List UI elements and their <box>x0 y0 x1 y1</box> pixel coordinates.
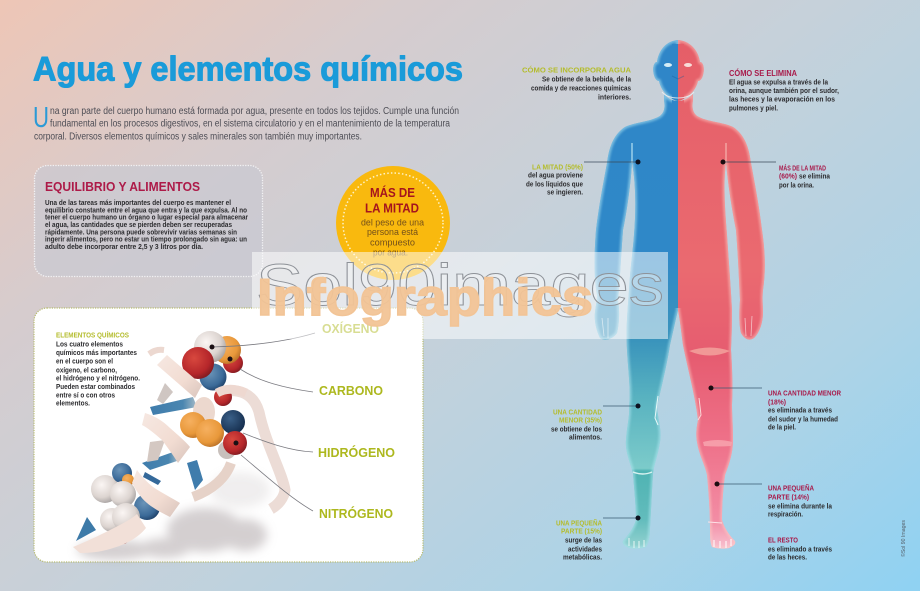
panel body text: ingerir alimentos, pero no estar un tiempo prolongado sin agua: un <box>45 237 247 244</box>
reflection shadow <box>77 472 270 560</box>
heading: EQUILIBRIO Y ALIMENTOS <box>45 179 200 194</box>
human body figure <box>595 40 765 549</box>
annotation: una pequeña parte 14% <box>714 482 832 519</box>
panel text: Los cuatro elementos <box>56 342 123 348</box>
body: blue half <box>595 40 678 549</box>
annotation: cómo se elimina: El agua se expulsa a través de la <box>729 80 828 86</box>
annotation: una cantidad menor 18%: de la piel. <box>768 425 796 432</box>
face details <box>662 63 694 98</box>
annotation: más de la mitad 60% <box>720 160 830 190</box>
panel text: en el cuerpo son el <box>56 358 113 366</box>
body: red edge glow <box>677 40 765 549</box>
annotation: cómo se elimina: las heces y la evaporación en los <box>729 97 835 104</box>
annotation: una cantidad menor 35% <box>551 404 640 442</box>
annotation: más de la mitad 60%: se elimina <box>799 174 830 181</box>
annotation: cómo se elimina: CÓMO SE ELIMINA <box>729 67 797 78</box>
annotation: cómo se elimina: orina, aunque también por el sudor, <box>729 88 839 95</box>
panel body text: rápidamente. Una persona puede sobrevivir varias semanas sin <box>45 230 237 236</box>
panel text: Pueden estar combinados <box>56 384 135 391</box>
annotation: una cantidad menor 35%: MENOR (35%) <box>559 418 602 425</box>
annotation: más de la mitad 60%: MÁS DE LA MITAD <box>779 164 826 172</box>
callout: más de la mitad: MÁS DE <box>370 185 415 200</box>
body: blue edge glow <box>595 40 679 549</box>
upper spheres <box>214 388 232 406</box>
molecule illustration <box>73 331 315 560</box>
annotation: una pequeña parte 15%: metabólicas. <box>563 555 602 562</box>
annotation: una pequeña parte 14%: respiración. <box>768 512 803 519</box>
drop cap: U <box>33 102 49 134</box>
panel text: elementos. <box>56 401 90 408</box>
leader lines <box>212 333 315 511</box>
annotation: una pequeña parte 15%: actividades <box>568 546 602 554</box>
annotation: una cantidad menor 35%: alimentos. <box>569 435 602 442</box>
callout: más de la mitad: compuesto <box>370 238 415 248</box>
panel text: el hidrógeno y el nitrógeno. <box>56 376 140 382</box>
intro text block: corporal. Diversos elementos químicos y sales minerales son también muy importantes. <box>34 132 362 142</box>
annotation: el resto <box>768 538 832 562</box>
panel: elementos químicos <box>34 308 423 562</box>
watermark: Infographics <box>257 269 593 327</box>
panel text: oxígeno, el carbono, <box>56 367 117 374</box>
panel text: ELEMENTOS QUÍMICOS <box>56 330 129 340</box>
panel text: entre sí o con otros <box>56 392 115 400</box>
annotation: el resto: es eliminado a través <box>768 546 832 554</box>
intro text block <box>33 102 459 142</box>
annotation: una pequeña parte 15% <box>556 516 640 562</box>
annotation: la mitad 50%: se ingieren. <box>547 190 583 197</box>
molecule dots <box>210 344 238 446</box>
annotation: una cantidad menor 18% <box>708 386 841 432</box>
watermark <box>252 252 668 339</box>
annotation: cómo se elimina <box>729 67 839 112</box>
watermark: Sol90images <box>256 253 664 318</box>
label: hidrógeno: HIDRÓGENO <box>318 445 395 460</box>
front pale ribbons <box>157 355 202 398</box>
annotation: una pequeña parte 15%: UNA PEQUEÑA <box>556 518 602 528</box>
blue ribbon tip <box>76 517 96 541</box>
panel body text: el agua, las cantidades que se pierden deben ser recuperadas <box>45 222 232 229</box>
annotation: cómo se incorpora agua: comida y de reacciones químicas <box>531 86 631 92</box>
panel text <box>56 330 140 408</box>
annotation: cómo se elimina: pulmones y piel. <box>729 106 778 112</box>
annotation: una pequeña parte 15%: PARTE (15%) <box>561 529 602 536</box>
annotation: cómo se incorpora agua: Se obtiene de la bebida, de la <box>542 76 631 84</box>
panel body text: tener el cuerpo humano un órgano o lugar especial para almacenar <box>45 215 248 222</box>
body: red half <box>678 40 765 549</box>
panel body text: Una de las tareas más importantes del cuerpo es mantener el <box>45 200 231 207</box>
annotation: la mitad 50%: del agua proviene <box>528 173 583 180</box>
panel text: químicos más importantes <box>56 350 137 357</box>
annotation: la mitad 50%: LA MITAD (50%) <box>532 164 583 172</box>
annotation: la mitad 50%: de los líquidos que <box>526 182 583 188</box>
panel body text: equilibrio constante entre el agua que entra y la que expulsa. Al no <box>45 208 247 214</box>
mid link <box>193 397 215 427</box>
annotation: más de la mitad 60%: por la orina. <box>779 182 814 190</box>
annotation: el resto: de las heces. <box>768 555 807 562</box>
panel: equilibrio y alimentos <box>34 166 262 276</box>
annotation: el resto: EL RESTO <box>768 538 798 544</box>
annotation: cómo se incorpora agua: interiores. <box>598 94 631 102</box>
back tube and blue ribbon <box>149 350 285 509</box>
panel body text: adulto debe incorporar entre 2,5 y 3 litros por día. <box>45 244 203 251</box>
highlight lines and bands <box>602 143 752 548</box>
annotation: una pequeña parte 15%: surge de las <box>565 538 602 544</box>
label: oxígeno: OXÍGENO <box>322 321 379 336</box>
callout: más de la mitad: del peso de una <box>361 218 425 228</box>
lower spheres <box>91 475 119 503</box>
annotation: una pequeña parte 14%: UNA PEQUEÑA <box>768 484 814 492</box>
annotation: una cantidad menor 18%: (18%) <box>768 400 786 406</box>
annotation: una cantidad menor 35%: UNA CANTIDAD <box>553 410 602 416</box>
intro text block: fundamental en los procesos digestivos, en el sistema circulatorio y en el mantenimiento de la temperatura <box>50 118 450 130</box>
annotation: una pequeña parte 14%: PARTE (14%) <box>768 494 809 502</box>
annotation: cómo se incorpora agua <box>522 66 631 102</box>
annotation: una cantidad menor 35%: se obtiene de los <box>551 426 602 434</box>
callout: más de la mitad: LA MITAD <box>365 200 419 216</box>
credit: ©Sol 90 Images <box>900 519 907 557</box>
annotation: cómo se incorpora agua: CÓMO SE INCORPORA AGUA <box>522 66 631 74</box>
callout: más de la mitad <box>336 166 450 280</box>
annotation: la mitad 50% <box>526 160 640 197</box>
annotation: una cantidad menor 18%: UNA CANTIDAD MENOR <box>768 390 841 398</box>
intro text block: na gran parte del cuerpo humano está formada por agua, presente en todos los tejidos. Cumple una función <box>50 106 459 117</box>
callout: más de la mitad: persona está <box>367 227 419 238</box>
label: nitrógeno: NITRÓGENO <box>319 506 393 521</box>
annotation: más de la mitad 60%: (60%) <box>779 174 797 181</box>
annotation: una cantidad menor 18%: es eliminada a través <box>768 408 832 415</box>
panel body text <box>45 200 248 251</box>
callout: más de la mitad: por agua. <box>373 248 408 258</box>
title: Agua y elementos químicos <box>33 50 463 88</box>
label: carbono: CARBONO <box>319 383 383 398</box>
annotation: una cantidad menor 18%: del sudor y la humedad <box>768 416 838 424</box>
annotation: una pequeña parte 14%: se elimina durante la <box>768 504 832 510</box>
